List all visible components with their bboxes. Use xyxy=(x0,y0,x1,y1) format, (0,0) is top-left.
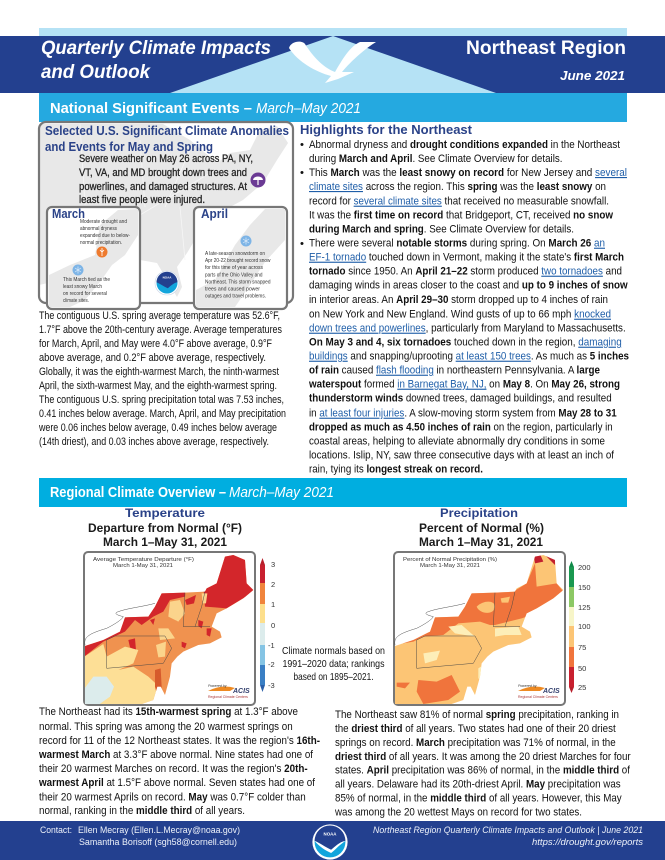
March snow text: This March tied as the xyxy=(63,277,110,283)
legend: precipitation color bar: 125 xyxy=(578,603,591,612)
icon: white bird xyxy=(289,42,376,83)
text block: national summary: The contiguous U.S. spring average temperature was 52.6°F, xyxy=(39,310,280,322)
text block: temperature summary: record for 11 of the 12 Northeast states. It was the region's 16th- xyxy=(39,735,320,747)
region: drier north xyxy=(393,563,563,645)
logo: ACIS: ACIS xyxy=(232,688,250,695)
icon: drought xyxy=(96,246,108,258)
contact details: Samantha Borisoff (sgh58@cornell.edu) xyxy=(79,837,237,847)
text block: highlights list: of rain caused flash flooding in northeastern Pennsylvania. A large xyxy=(309,365,600,377)
April text xyxy=(205,251,271,300)
March drought text: abnormal dryness xyxy=(80,226,117,232)
chart: precipitation percent map xyxy=(393,550,567,707)
April text: trees and caused power xyxy=(205,286,260,292)
callout: severe weather: VT, VA, and MD brought down trees and xyxy=(79,167,247,179)
callout: severe weather: least five people were injured. xyxy=(79,194,205,206)
logo: ACIS: Powered by xyxy=(518,684,537,688)
region: warmest Maine xyxy=(203,553,257,608)
heading: temperature xyxy=(88,508,242,549)
text block: highlights list: buildings and snapping/uprooting at least 150 trees. As much as 5 inches xyxy=(309,351,629,363)
legend: temperature color bar: 0 xyxy=(271,621,275,630)
legend: temperature color bar: -3 xyxy=(268,681,275,690)
section band: national events: March–May 2021 xyxy=(256,100,361,117)
map heading: and Events for May and Spring xyxy=(45,140,213,154)
text block: national summary: (14th driest), and 0.03 inches above average, respectively. xyxy=(39,436,269,448)
text block: precipitation summary: 85% of normal, in the middle third of all years. However, this May xyxy=(335,793,622,805)
contact details: Contact: xyxy=(40,825,72,835)
text block: highlights list xyxy=(300,139,629,476)
March drought text: normal precipitation. xyxy=(80,240,122,246)
text block: national summary: above average, and 0.2°F above average, respectively. xyxy=(39,352,266,364)
heading: temperature: March 1–May 31, 2021 xyxy=(103,536,228,549)
text block: highlights list: coastal areas, helping to alleviate abnormally dry conditions in some xyxy=(309,436,605,448)
section band: national events xyxy=(39,93,627,122)
text block: national summary: 0.41 inches below average. March, April, and May precipitation xyxy=(39,408,286,420)
legend: precipitation color bar: 200 xyxy=(578,563,591,572)
March drought text xyxy=(80,219,130,246)
text block: highlights list: EF-1 tornado touched down in Vermont, making it the state's first March xyxy=(309,252,624,264)
panel: March xyxy=(47,207,140,309)
note: climate normals: Climate normals based on xyxy=(282,645,385,657)
note: climate normals: based on 1895–2021. xyxy=(294,671,374,683)
text block: highlights list: thunderstorm winds downed trees, damaged buildings, and resulted xyxy=(309,393,612,405)
icon: snow March xyxy=(72,264,84,276)
text block: highlights list: There were several notable storms during spring. On March 26 an xyxy=(309,238,605,250)
panel: national significant events map xyxy=(39,122,293,309)
title xyxy=(41,38,271,83)
text block: temperature summary: warmest April at 1.5°F above normal. Seven states had one of xyxy=(38,777,316,789)
text block: temperature summary: their 20 warmest Marches on record. It was the region's 20th- xyxy=(39,763,308,775)
text block: highlights list: in at least four injuries. A slow-moving storm system from May 28 to 31 xyxy=(309,408,617,420)
legend: temperature color bar xyxy=(260,558,275,692)
icon: severe weather xyxy=(250,172,266,188)
section band: regional overview: March–May 2021 xyxy=(229,484,334,501)
text block: highlights list: during March and April. See Climate Overview for details. xyxy=(309,153,562,165)
text block: highlights list: climate sites across the region. This spring was the least snowy on xyxy=(309,181,606,193)
section band: regional overview xyxy=(39,478,627,507)
text block: highlights list: • xyxy=(300,139,304,151)
March drought text: expanded due to below- xyxy=(80,233,130,239)
text block: highlights list: On May 3 and 4, six tornadoes touched down in the region, damaging xyxy=(309,337,622,349)
text block: highlights list: tornado since 1950. An April 21–22 storm produced two tornadoes and xyxy=(309,266,622,278)
panel: April xyxy=(194,207,287,309)
text block: highlights list: during March and spring. See Climate Overview for details. xyxy=(309,224,574,236)
text block: highlights list: dropped as much as 4.50 inches of rain on the region, particularly in xyxy=(309,422,613,434)
title: and Outlook xyxy=(41,62,151,83)
legend: temperature color bar: -1 xyxy=(268,641,275,650)
legend: precipitation color bar: 150 xyxy=(578,583,591,592)
note: climate normals xyxy=(282,645,385,683)
text block: national summary: 1.7°F above the 20th-century average. Average temperatures xyxy=(39,324,282,336)
text block: precipitation summary: states. April precipitation was 86% of normal, in the middle third of xyxy=(335,765,631,777)
text block: national summary: for March, April, and May were 4.0°F above average, 0.9°F xyxy=(39,338,272,350)
map caption: March 1-May 31, 2021 xyxy=(420,563,480,569)
contact details: Ellen Mecray (Ellen.L.Mecray@noaa.gov) xyxy=(78,825,240,835)
April text: A late-season snowstorm on xyxy=(205,251,265,257)
logo: ACIS: Regional Climate Centers xyxy=(518,695,558,699)
text block: highlights list: • xyxy=(300,167,304,179)
April text: for this time of year across xyxy=(205,265,263,271)
note: climate normals: 1991–2020 data; rankings xyxy=(282,658,384,670)
legend: temperature color bar: 2 xyxy=(271,580,275,589)
state borders xyxy=(395,592,520,668)
title: Quarterly Climate Impacts xyxy=(41,38,271,59)
text block: temperature summary: normal. This spring was among the 20 warmest springs on xyxy=(39,721,293,733)
text block: temperature summary: The Northeast had its 15th-warmest spring at 1.3°F above xyxy=(39,706,298,718)
March snow text: climate sites. xyxy=(63,298,89,304)
map caption: March 1-May 31, 2021 xyxy=(113,563,173,569)
text block: precipitation summary: driest third of all years. It was among the 20 driest Marches for four xyxy=(335,751,631,763)
text block: highlights list: Abnormal dryness and drought conditions expanded in the Northeast xyxy=(309,139,621,151)
report citation: Northeast Region Quarterly Climate Impacts and Outlook | June 2021 xyxy=(373,825,643,835)
legend: precipitation color bar: 25 xyxy=(578,683,586,692)
map heading: Selected U.S. Significant Climate Anomalies xyxy=(45,124,289,138)
text block: precipitation summary: the driest third of all years. Two states had one of their 20 driest xyxy=(335,723,616,735)
region heading: June 2021 xyxy=(560,68,625,83)
legend: temperature color bar: -2 xyxy=(268,660,275,669)
legend: precipitation color bar: 75 xyxy=(578,643,586,652)
text block: highlights list: • xyxy=(300,238,304,250)
April text: parts of the Ohio Valley and xyxy=(205,272,262,278)
March snow text: on record for several xyxy=(63,291,107,297)
text block: national summary: The contiguous U.S. spring precipitation total was 7.53 inches, xyxy=(39,394,284,406)
March snow text xyxy=(63,277,110,304)
logo: ACIS: ACIS xyxy=(542,688,560,695)
region heading: Northeast Region xyxy=(466,38,626,59)
icon: NOAA logo: NOAA xyxy=(163,276,172,280)
logo: ACIS xyxy=(208,684,250,699)
text block: precipitation summary: The Northeast saw 81% of normal spring precipitation, ranking in xyxy=(335,709,619,721)
panel: March: March xyxy=(52,207,85,221)
section band: national events: National Significant Events – xyxy=(50,100,252,117)
region heading xyxy=(466,38,626,83)
text block: highlights list: It was the first time on record that Bridgeport, CT, received no snow xyxy=(309,210,613,222)
text block: national summary: April, the sixth-warmest May, and the eighth-warmest spring. xyxy=(39,380,277,392)
heading: temperature: Departure from Normal (°F) xyxy=(88,522,242,535)
map caption: Percent of Normal Precipitation (%) xyxy=(403,557,497,563)
icon: NOAA logo: NOAA xyxy=(324,831,337,836)
map caption xyxy=(403,557,497,569)
logo: ACIS: Powered by xyxy=(208,684,227,688)
state borders xyxy=(85,592,210,668)
report citation xyxy=(373,825,644,847)
legend: precipitation color bar: 50 xyxy=(578,664,586,673)
April text: Northeast. This storm snapped xyxy=(205,280,270,286)
icon: NOAA logo xyxy=(312,824,348,860)
legend: temperature color bar: 3 xyxy=(271,560,275,569)
text block: temperature summary xyxy=(38,706,320,817)
text block: highlights list: rain, tying its longest streak on record. xyxy=(309,464,483,476)
legend: temperature color bar: 1 xyxy=(271,600,275,609)
April text: outages and travel problems. xyxy=(205,294,266,300)
heading: precipitation: March 1–May 31, 2021 xyxy=(419,536,544,549)
text block: precipitation summary: springs on record. March precipitation was 71% of normal, in the xyxy=(335,737,616,749)
heading: temperature: Temperature xyxy=(125,508,205,520)
text block: temperature summary: their 20 warmest Aprils on record. May was 0.7°F colder than xyxy=(39,792,306,804)
footer band xyxy=(0,821,665,860)
header banner xyxy=(0,28,665,93)
text block: highlights list: locations. Islip, NY, saw three consecutive days with at least an inch of xyxy=(309,450,615,462)
map caption xyxy=(93,557,194,569)
April text: Apr 20-22 brought record snow xyxy=(205,258,271,264)
text block: highlights list: in interior areas. An April 29–30 storm dropped up to 4 inches of rain xyxy=(309,294,608,306)
text block: precipitation summary: all years. Delaware had its 20th-driest April. May precipitation was xyxy=(335,779,621,791)
map caption: Average Temperature Departure (°F) xyxy=(93,557,194,563)
legend: precipitation color bar xyxy=(569,561,591,693)
text block: highlights list: record for several climate sites that received no measurable snowfall. xyxy=(309,196,609,208)
text block: highlights list: damaging winds in areas closer to the coast and up to 9 inches of snow xyxy=(309,280,628,292)
text block: precipitation summary xyxy=(334,709,631,819)
icon: snow April xyxy=(240,236,252,246)
contact details xyxy=(40,825,240,847)
March drought text: Moderate drought and xyxy=(80,219,127,225)
heading: precipitation: Precipitation xyxy=(440,508,518,520)
logo: ACIS xyxy=(518,684,560,699)
heading: precipitation: Percent of Normal (%) xyxy=(419,522,544,535)
panel: April: April xyxy=(201,207,228,221)
March snow text: least snowy March xyxy=(63,284,102,290)
callout: severe weather: Severe weather on May 26 across PA, NY, xyxy=(79,153,253,165)
text block: highlights list: This March was the least snowy on record for New Jersey and several xyxy=(309,167,627,179)
US map background xyxy=(39,124,288,297)
text block: highlights list: down trees and powerlines, particularly from Maryland to Massachusetts. xyxy=(309,323,626,335)
text block: national summary: Globally, it was the eighth-warmest March, the ninth-warmest xyxy=(39,366,280,378)
section band: regional overview: Regional Climate Overview – xyxy=(50,484,226,501)
text block: national summary: were 0.06 inches below average, 0.49 inches below average xyxy=(38,422,277,434)
heading: highlights: Highlights for the Northeast xyxy=(300,123,473,137)
heading: precipitation xyxy=(419,508,544,549)
text block: highlights list: on New York and New England. Wind gusts of up to 66 mph knocked xyxy=(309,309,611,321)
legend: precipitation color bar: 100 xyxy=(578,622,591,631)
logo: ACIS: Regional Climate Centers xyxy=(208,695,248,699)
text block: national summary xyxy=(38,310,286,448)
callout: severe weather xyxy=(79,153,253,206)
text block: precipitation summary: was among the 20 wettest Mays on record for two states. xyxy=(334,807,582,819)
report citation: https://drought.gov/reports xyxy=(532,837,644,847)
chart: temperature departure map xyxy=(83,550,257,707)
text block: temperature summary: normal, ranking in the middle third of all years. xyxy=(39,805,245,817)
map heading xyxy=(45,124,289,154)
text block: highlights list: waterspout formed in Barnegat Bay, NJ, on May 8. On May 26, strong xyxy=(308,379,620,391)
icon: NOAA logo xyxy=(155,271,179,295)
text block: temperature summary: warmest March at 3.3°F above normal. Nine states had one of xyxy=(38,749,314,761)
callout: severe weather: powerlines, and damaged structures. At xyxy=(79,181,247,193)
